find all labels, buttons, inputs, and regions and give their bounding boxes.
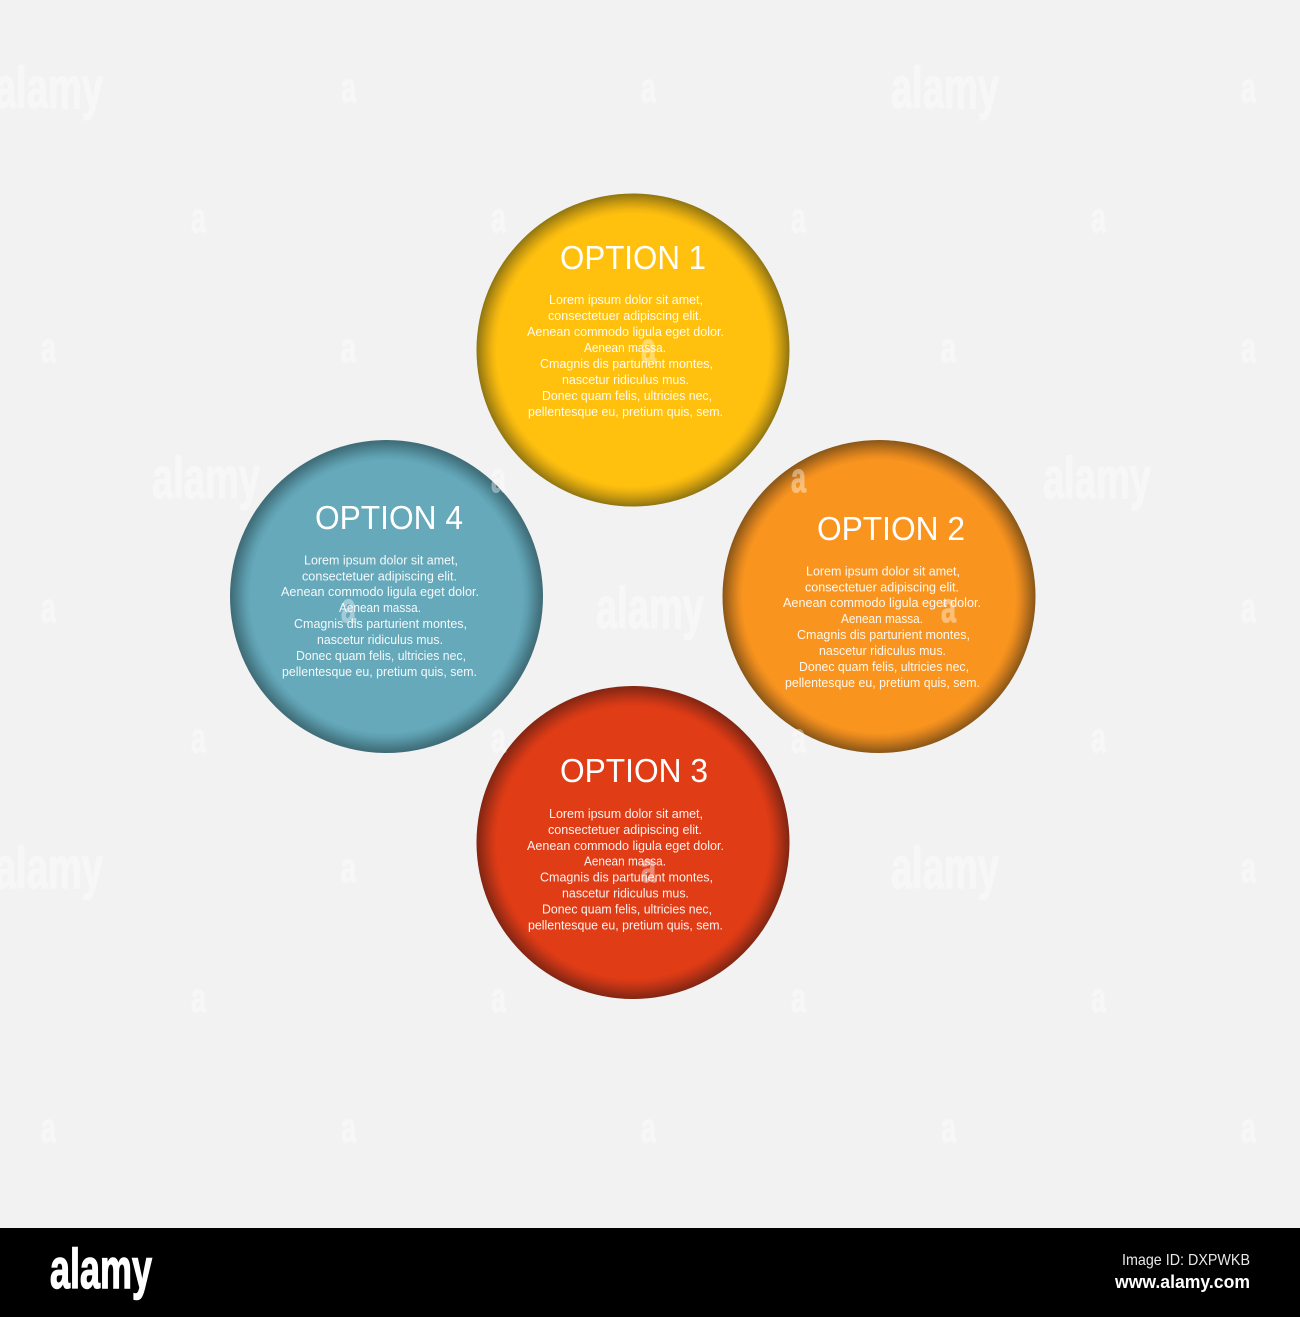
watermark pattern: a [941,324,956,371]
text block: option 2 body: Aenean massa. [841,611,923,626]
watermark pattern: a [1091,714,1106,761]
text block: option 4 body: Donec quam felis, ultricies nec, [296,648,466,663]
text block: option 1 body: pellentesque eu, pretium quis, sem. [528,404,723,419]
panel: option 2 circle [722,440,1036,753]
text block: option 3 body: Lorem ipsum dolor sit amet, [549,806,703,821]
text block: option 4 body [281,552,479,679]
watermark pattern: a [941,584,956,631]
watermark pattern: a [1241,844,1256,891]
watermark pattern: a [641,324,656,371]
footer logo: alamy [50,1237,152,1300]
text block: option 1 body: Cmagnis dis parturient montes, [540,356,713,371]
panel: option 1 circle [476,194,790,506]
watermark pattern: a [341,584,356,631]
text block: option 1 body: Aenean commodo ligula eget dolor. [527,324,724,339]
watermark pattern: a [791,714,806,761]
watermark pattern: alamy [891,56,999,121]
watermark pattern: a [491,974,506,1021]
watermark pattern: a [41,1104,56,1151]
heading: option 2: OPTION 2 [817,511,965,548]
watermark pattern: a [341,1104,356,1151]
watermark pattern: a [41,584,56,631]
text block: option 4 body: nascetur ridiculus mus. [317,632,443,647]
text block: option 4 body: pellentesque eu, pretium quis, sem. [282,664,477,679]
text block: option 2 body: nascetur ridiculus mus. [819,643,946,658]
watermark pattern: a [341,64,356,111]
watermark pattern: alamy [1043,446,1151,511]
watermark pattern: a [491,714,506,761]
text block: option 3 body: pellentesque eu, pretium quis, sem. [528,918,723,932]
text block: option 4 body: Lorem ipsum dolor sit amet, [304,552,458,568]
watermark pattern: a [191,194,206,241]
watermark pattern: a [641,1104,656,1151]
website url: www.alamy.com [1114,1272,1250,1292]
watermark pattern: a [1091,194,1106,241]
text block: option 2 body: consectetuer adipiscing elit. [805,580,959,594]
text block: option 2 body [783,564,981,690]
watermark pattern: a [341,324,356,371]
text block: option 3 body: consectetuer adipiscing elit. [548,822,702,837]
watermark pattern: a [791,974,806,1021]
heading: option 1: OPTION 1 [560,240,706,277]
text block: option 3 body: Cmagnis dis parturient montes, [540,870,713,884]
image id: Image ID: DXPWKB [1122,1252,1250,1269]
footer bar [0,1228,1300,1317]
watermark pattern: a [191,714,206,761]
watermark pattern: a [1241,324,1256,371]
heading: option 3: OPTION 3 [560,753,708,790]
watermark pattern: a [341,844,356,891]
text block: option 1 body: Donec quam felis, ultricies nec, [542,388,712,403]
text block: option 2 body: Cmagnis dis parturient montes, [797,627,970,642]
text block: option 3 body: nascetur ridiculus mus. [562,886,689,900]
panel: option 3 circle [476,686,790,999]
text block: option 4 body: consectetuer adipiscing elit. [302,568,457,584]
watermark pattern: a [1091,974,1106,1021]
watermark pattern: alamy [891,836,999,901]
watermark pattern: a [1241,64,1256,111]
watermark pattern: a [791,194,806,241]
text block: option 2 body: Lorem ipsum dolor sit amet, [806,564,960,578]
text block: option 1 body: consectetuer adipiscing elit. [548,308,702,323]
text block: option 1 body: nascetur ridiculus mus. [562,372,689,387]
watermark pattern: a [791,454,806,501]
text block: option 4 body: Cmagnis dis parturient montes, [294,616,467,631]
watermark pattern: a [941,1104,956,1151]
text block: option 4 body: Aenean commodo ligula eget dolor. [281,584,479,599]
text block: option 4 body: Aenean massa. [339,600,421,615]
watermark pattern: a [191,974,206,1021]
text block: option 1 body: Lorem ipsum dolor sit amet, [549,292,703,307]
watermark pattern: a [41,324,56,371]
watermark pattern: alamy [596,576,704,641]
watermark pattern: a [491,454,506,501]
watermark pattern: a [641,64,656,111]
text block: option 1 body [527,292,724,419]
text block: option 2 body: Aenean commodo ligula eget dolor. [783,595,981,610]
watermark pattern: a [1241,1104,1256,1151]
heading: option 4: OPTION 4 [315,500,463,537]
text block: option 3 body: Aenean massa. [584,854,666,868]
text block: option 3 body [527,806,724,932]
panel: option 4 circle [230,440,543,753]
text block: option 2 body: Donec quam felis, ultricies nec, [799,659,969,674]
text block: option 1 body: Aenean massa. [584,340,666,355]
text block: option 3 body: Aenean commodo ligula eget dolor. [527,838,724,853]
watermark pattern: alamy [152,446,260,511]
watermark pattern: a [491,194,506,241]
text block: option 2 body: pellentesque eu, pretium quis, sem. [785,675,980,690]
text block: option 3 body: Donec quam felis, ultricies nec, [542,902,712,916]
watermark pattern: a [1241,584,1256,631]
watermark pattern: a [641,844,656,891]
